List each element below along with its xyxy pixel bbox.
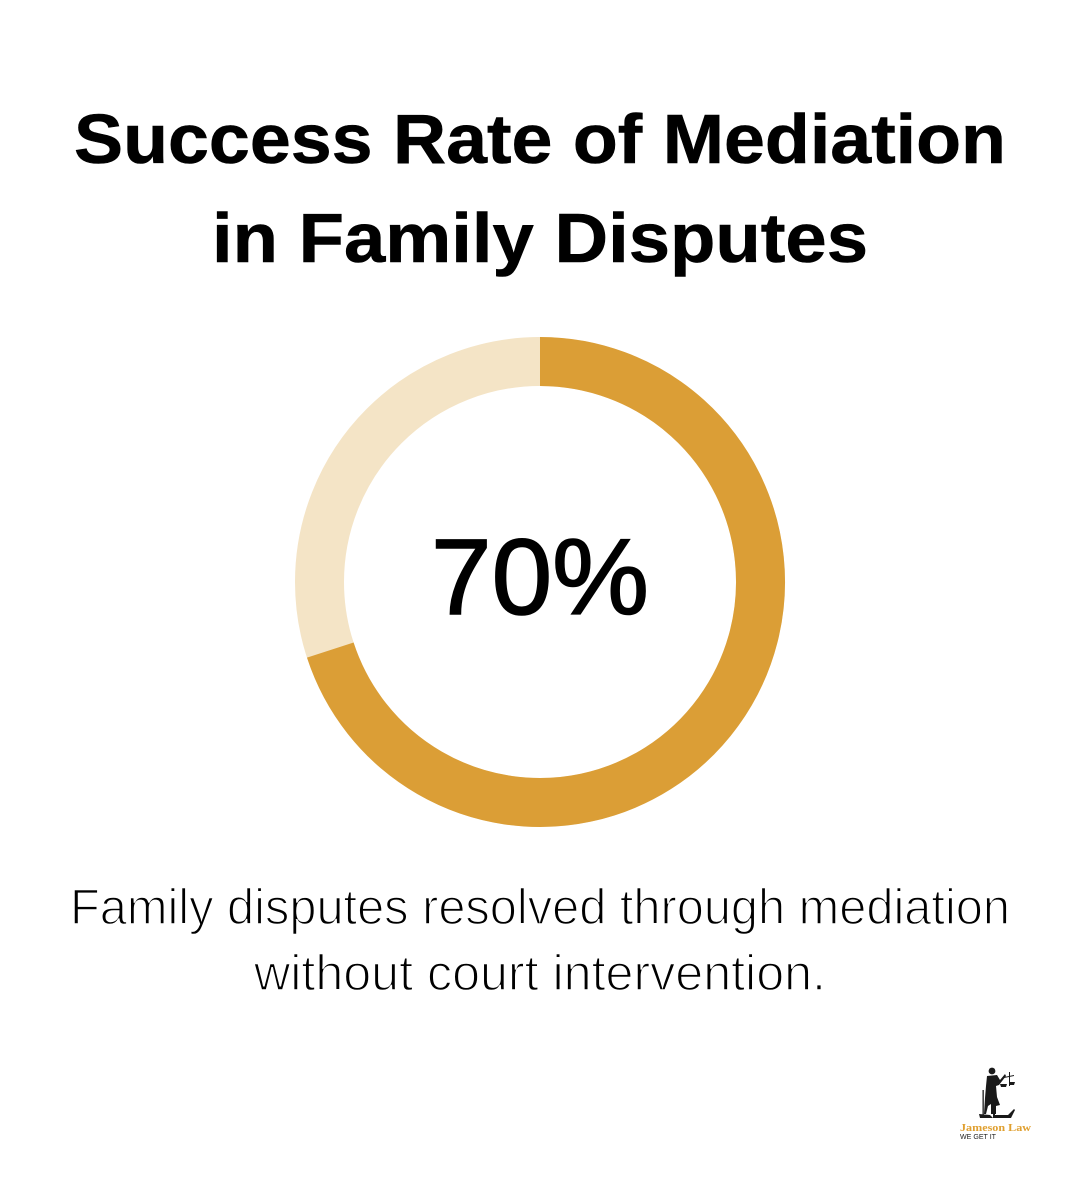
donut chart: 70% [320,362,761,802]
logo: Jameson Law [960,1068,1031,1141]
logo tagline: WE GET IT [960,1134,997,1141]
logo wordmark: Jameson Law [960,1123,1031,1134]
title: in Family Disputes [212,199,868,277]
title: Success Rate of Mediation [74,100,1006,178]
description text [70,879,1010,1001]
donut value arc [330,362,761,802]
percentage value: 70% [431,516,649,637]
description text: without court intervention. [253,945,826,1001]
icon: lady justice [979,1068,1015,1118]
description text: Family disputes resolved through mediation [70,879,1010,935]
title [74,100,1006,277]
donut track [320,362,760,802]
